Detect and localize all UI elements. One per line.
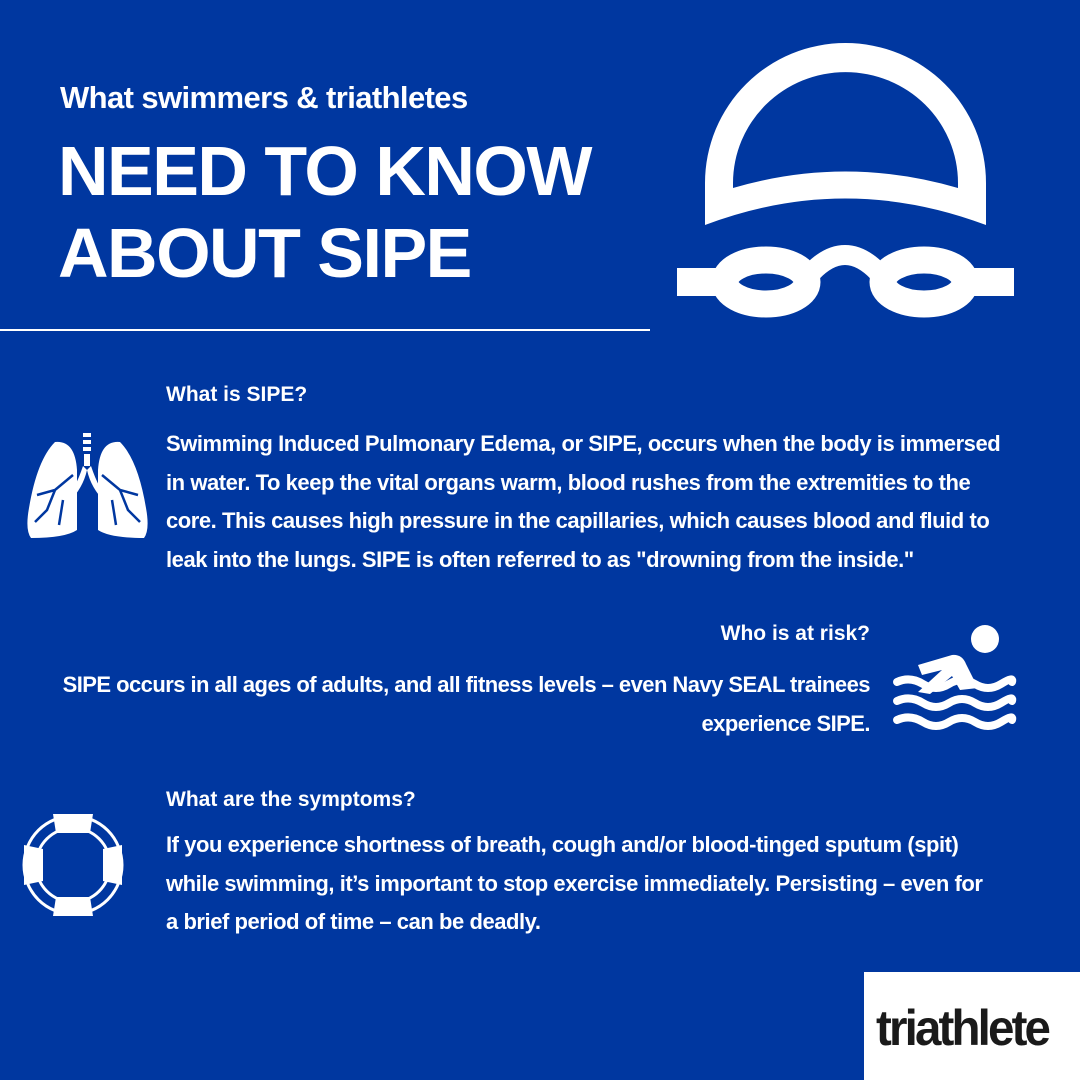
title: ABOUT SIPE [58, 214, 471, 292]
text: symptoms: while swimming, it’s important to stop exercise immediately. Persisting – even for [166, 870, 982, 896]
icon: swim cap and goggles [677, 43, 1014, 318]
heading: who is at risk: Who is at risk? [721, 622, 870, 645]
text: who is at risk: experience SIPE. [701, 710, 870, 736]
text: what is SIPE: leak into the lungs. SIPE is often referred to as "drowning from the inside." [166, 546, 914, 572]
text: symptoms: a brief period of time – can be deadly. [166, 909, 540, 934]
text: who is at risk [63, 672, 870, 736]
logo: triathlete: triathlete [876, 1000, 1048, 1056]
text: what is SIPE: Swimming Induced Pulmonary Edema, or SIPE, occurs when the body is immersed [166, 431, 1000, 456]
text: what is SIPE: core. This causes high pressure in the capillaries, which causes blood and fluid to [166, 508, 989, 533]
logo: triathlete [864, 972, 1080, 1080]
heading: symptoms: What are the symptoms? [166, 788, 416, 811]
text: what is SIPE: in water. To keep the vital organs warm, blood rushes from the extremities to the [166, 470, 970, 494]
text: symptoms [166, 832, 983, 934]
subtitle: What swimmers & triathletes [60, 80, 468, 115]
text: what is SIPE [166, 431, 1000, 572]
icon: swimmer [893, 625, 1016, 730]
text: who is at risk: SIPE occurs in all ages of adults, and all fitness levels – even Navy SEAL trainees [63, 672, 870, 697]
icon: lungs [27, 433, 148, 538]
title: NEED TO KNOW [58, 132, 591, 210]
icon: lifebuoy [22, 814, 124, 916]
title [58, 132, 592, 292]
text: symptoms: If you experience shortness of breath, cough and/or blood-tinged sputum (spit) [166, 832, 958, 857]
heading: What is SIPE: What is SIPE? [166, 383, 307, 406]
